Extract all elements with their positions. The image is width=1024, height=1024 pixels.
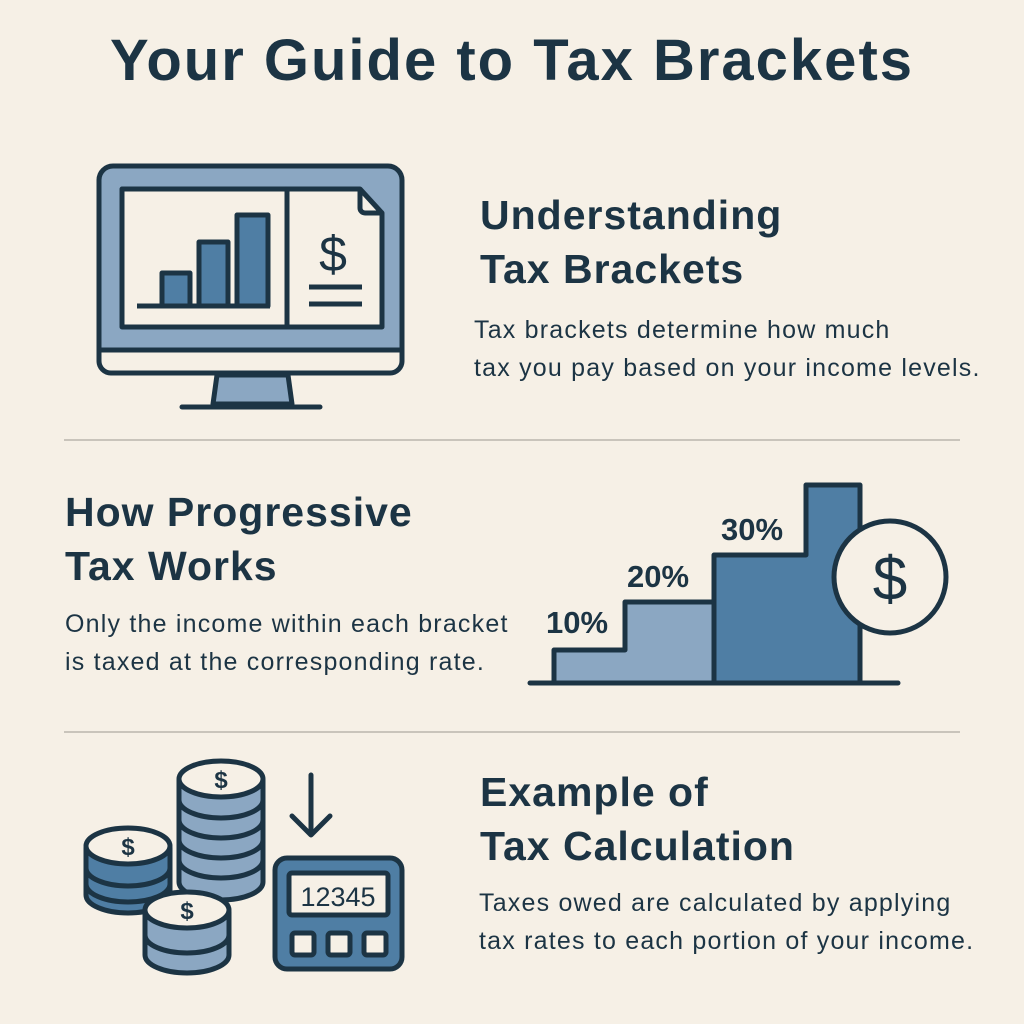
heading: example <box>480 769 795 869</box>
icon: coins and calculator <box>86 761 402 973</box>
text: understanding <box>474 316 981 382</box>
text: progressive <box>65 610 509 676</box>
text: progressive: Only the income within each bracket <box>65 610 509 638</box>
chart: progressive steps: 30% <box>721 512 783 547</box>
text: understanding: tax you pay based on your income levels. <box>474 354 981 382</box>
icon: monitor <box>99 166 402 407</box>
icon: coins and calculator: $ <box>214 767 228 794</box>
heading: progressive: How Progressive <box>65 489 413 535</box>
text: example: Taxes owed are calculated by applying <box>479 889 951 917</box>
heading: understanding: Understanding <box>480 192 782 238</box>
chart: progressive steps <box>530 485 946 683</box>
icon: monitor: $ <box>319 226 347 282</box>
text: example <box>479 889 974 955</box>
chart: progressive steps: 20% <box>627 559 689 594</box>
chart: progressive steps: 10% <box>546 605 608 640</box>
icon: coins and calculator: $ <box>121 834 135 861</box>
chart: progressive steps: $ <box>873 545 907 614</box>
heading: understanding: Tax Brackets <box>480 246 744 292</box>
heading: progressive <box>65 489 413 589</box>
text: example: tax rates to each portion of your income. <box>479 927 974 955</box>
heading: example: Example of <box>480 769 709 815</box>
text: understanding: Tax brackets determine how much <box>474 316 891 344</box>
heading: example: Tax Calculation <box>480 823 795 869</box>
heading: progressive: Tax Works <box>65 543 278 589</box>
icon: coins and calculator: 12345 <box>300 882 376 912</box>
text: progressive: is taxed at the corresponding rate. <box>65 648 485 676</box>
title: Your Guide to Tax Brackets <box>110 28 914 93</box>
heading: understanding <box>480 192 782 292</box>
icon: coins and calculator: $ <box>180 898 194 925</box>
